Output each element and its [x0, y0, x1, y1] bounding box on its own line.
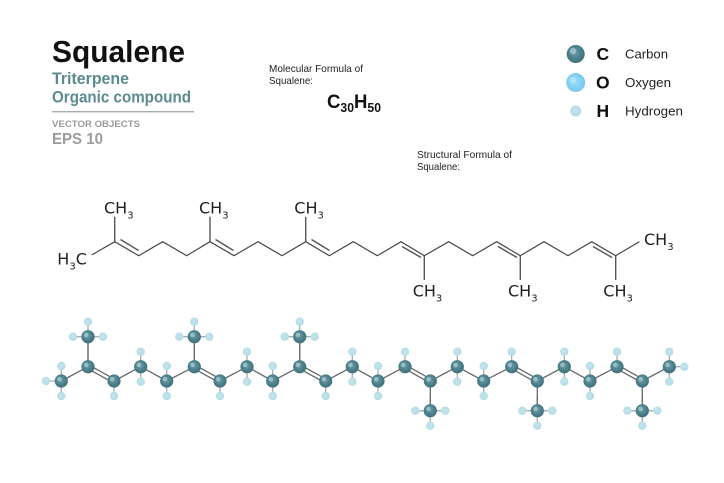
molecular formula C30H50: C	[327, 92, 341, 113]
skeletal labels: 3	[222, 210, 229, 221]
carbon atoms	[55, 330, 676, 417]
divider line under subtitle	[52, 111, 194, 112]
label: EPS 10: EPS 10	[52, 131, 103, 148]
molecular formula C30H50: H	[354, 92, 367, 113]
legend: hydrogen: Hydrogen	[625, 104, 683, 118]
legend: hydrogen	[570, 101, 683, 121]
skeletal labels: H	[57, 249, 69, 268]
legend: oxygen: Oxygen	[625, 75, 671, 90]
carbon bonds	[61, 337, 669, 411]
title: Squalene: Squalene	[52, 34, 185, 69]
structural formula caption: Structural Formula of	[417, 149, 512, 161]
hydrogen bonds	[46, 322, 684, 426]
legend: oxygen	[566, 72, 671, 92]
skeletal labels: 3	[127, 210, 134, 221]
molecular formula caption	[269, 63, 363, 87]
legend	[566, 44, 683, 121]
ball and stick model	[42, 318, 689, 430]
skeletal labels: CH	[603, 282, 627, 301]
hydrogen atoms	[42, 318, 689, 430]
subtitle: Organic compound: Organic compound	[52, 88, 191, 106]
label: vector objects: VECTOR OBJECTS	[52, 119, 140, 130]
skeletal labels: 3	[436, 294, 442, 305]
skeletal labels: CH	[199, 198, 222, 217]
skeletal labels: 3	[318, 210, 324, 221]
skeletal labels: CH	[508, 282, 531, 301]
skeletal labels: C	[76, 249, 87, 268]
skeletal labels: CH	[294, 198, 318, 217]
legend: hydrogen: H	[596, 101, 609, 121]
legend: oxygen: O	[596, 72, 610, 92]
skeletal labels: CH	[413, 282, 436, 301]
skeletal bonds	[92, 217, 639, 280]
subtitle: Triterpene: Triterpene	[52, 69, 129, 88]
skeletal labels: 3	[531, 294, 538, 305]
title block	[52, 34, 194, 148]
legend: carbon	[567, 44, 668, 64]
skeletal labels	[57, 198, 674, 305]
skeletal labels: 3	[667, 242, 674, 253]
legend: carbon: C	[596, 44, 610, 64]
molecular formula caption: Squalene:	[269, 75, 313, 87]
skeletal labels: CH	[104, 198, 127, 217]
structural skeletal formula	[57, 198, 674, 305]
legend: carbon: Carbon	[625, 46, 668, 62]
structural formula caption: Squalene:	[417, 161, 460, 173]
molecular formula C30H50: 50	[367, 101, 381, 115]
skeletal labels: CH	[644, 230, 667, 249]
skeletal labels: 3	[69, 261, 76, 272]
structural formula caption	[417, 149, 512, 173]
molecular formula caption: Molecular Formula of	[269, 63, 363, 75]
molecular formula C30H50: 30	[340, 101, 354, 115]
skeletal labels: 3	[627, 294, 633, 305]
